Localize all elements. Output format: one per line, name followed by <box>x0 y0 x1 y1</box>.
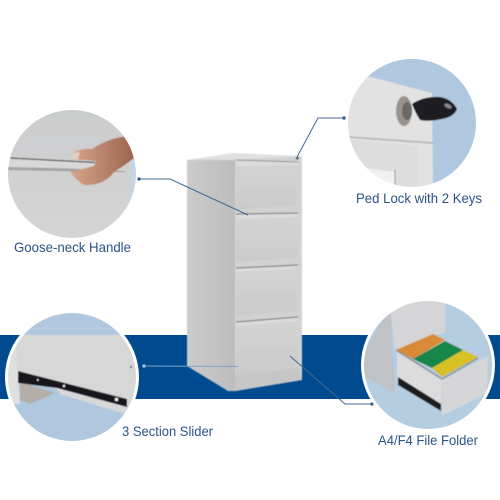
leader: file folder <box>290 356 373 405</box>
black key <box>412 97 457 121</box>
drawer 2 <box>236 213 298 262</box>
cabinet upper front <box>390 296 445 350</box>
label: file folder: A4/F4 File Folder <box>378 432 478 448</box>
leader: slider <box>143 365 238 367</box>
lock ring <box>396 96 412 126</box>
drawer side <box>397 352 442 410</box>
handle black line <box>10 158 95 162</box>
cabinet side panel <box>364 314 395 393</box>
drawer 1 <box>236 160 298 210</box>
label: ped lock: Ped Lock with 2 Keys <box>356 190 482 206</box>
orange folder <box>396 334 445 359</box>
black rail <box>18 371 127 407</box>
filing cabinet <box>187 153 302 391</box>
lower panel <box>350 140 418 191</box>
shadow underside <box>20 382 55 404</box>
hand <box>70 136 134 185</box>
cabinet front <box>235 156 302 391</box>
circle: slider ring <box>5 310 139 444</box>
label: slider: 3 Section Slider <box>122 423 213 439</box>
drawer front <box>442 356 488 416</box>
circle: folder ring <box>361 298 495 432</box>
lock on cabinet <box>296 157 298 160</box>
handle strip <box>9 160 94 168</box>
drawer 4 <box>236 317 298 375</box>
cabinet base <box>235 368 302 391</box>
side panel <box>16 334 136 412</box>
green folder <box>413 341 463 368</box>
circle: goose-neck handle photo <box>8 110 136 238</box>
drawer rim <box>396 350 478 379</box>
side hole <box>130 366 132 368</box>
circle: slider photo <box>8 313 136 441</box>
drawer 3 <box>236 265 298 316</box>
cabinet corner <box>345 74 433 191</box>
cabinet top <box>187 153 302 161</box>
blue band <box>0 335 500 399</box>
circle: folder photo <box>364 301 492 429</box>
drawer gap <box>348 137 433 143</box>
leader: goose-neck handle <box>138 178 248 215</box>
label: goose-neck handle: Goose-neck Handle <box>14 239 131 255</box>
yellow folder <box>432 350 478 377</box>
cabinet side <box>187 160 235 391</box>
light sliver <box>130 160 136 200</box>
black slot <box>398 377 441 411</box>
circle: ped lock photo <box>348 59 476 187</box>
rail rivets <box>63 385 65 387</box>
leader: ped lock <box>297 117 345 157</box>
white strip under rail <box>57 389 127 414</box>
